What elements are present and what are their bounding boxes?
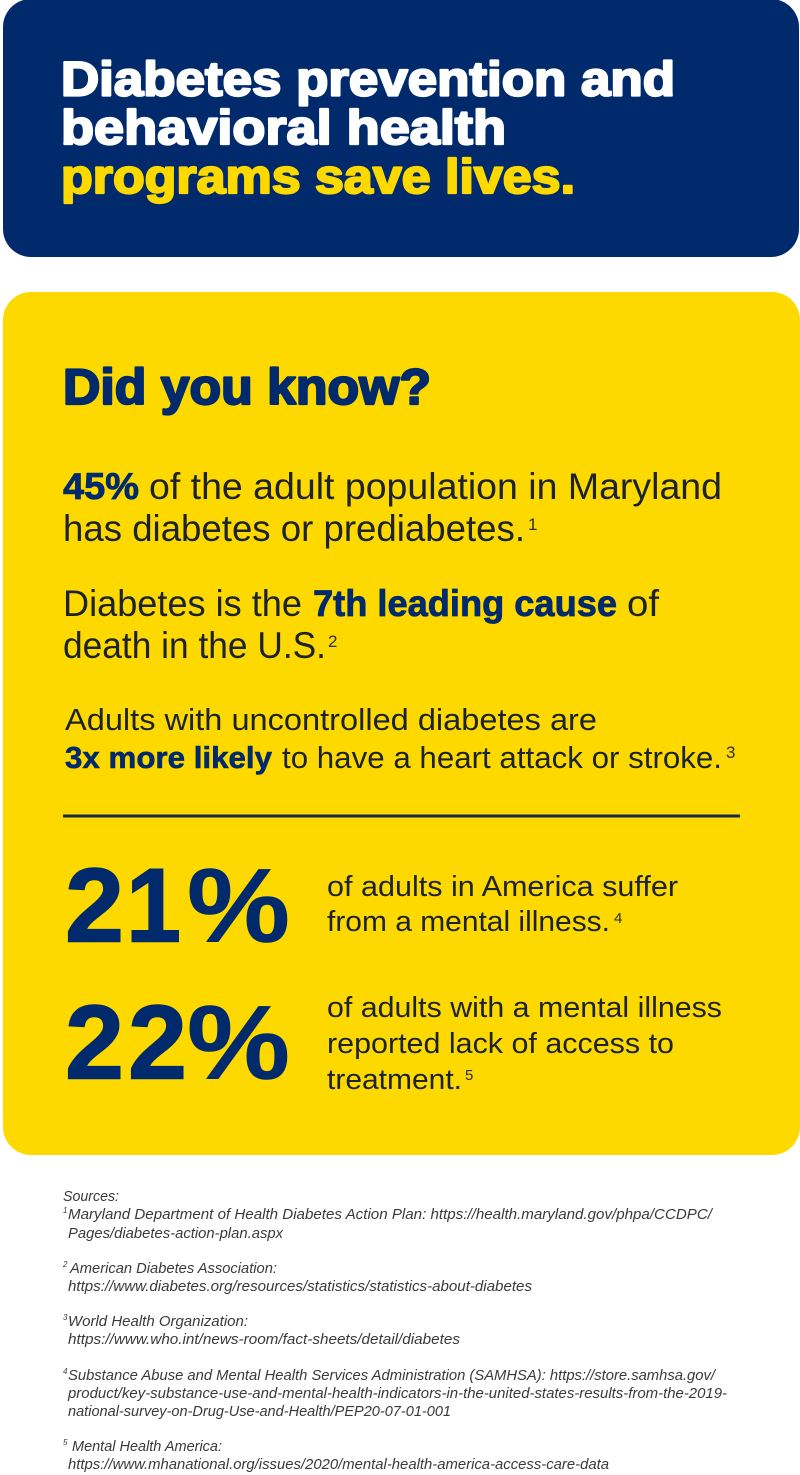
sources: American Diabetes Association:: [69, 1260, 277, 1277]
stat: 21 percent: 1: [126, 848, 181, 964]
sources: Maryland Department of Health Diabetes Action Plan: https://health.maryland.gov/phpa/CCDPC/: [68, 1206, 714, 1223]
sources: 4: [63, 1367, 68, 1376]
sources: Substance Abuse and Mental Health Services Administration (SAMHSA): https://store.samhsa.gov/: [68, 1367, 717, 1384]
fact: 3x more likely: to have a heart attack or stroke.: [282, 740, 722, 775]
fact: 7th leading cause: [63, 583, 660, 666]
stat text: 21 percent: 4: [614, 910, 622, 927]
stat: 21 percent: %: [187, 848, 290, 964]
fact: 3x more likely: 3: [726, 743, 735, 762]
stat: 21 percent: 2: [65, 848, 124, 964]
fact: 3x more likely: [65, 702, 735, 775]
sources: 2: [62, 1260, 68, 1269]
fact: 3x more likely: 3x more likely: [65, 740, 273, 775]
stat text: 22 percent: treatment.: [327, 1064, 462, 1096]
stat: 21 percent: [65, 848, 678, 964]
stat text: 22 percent: 5: [465, 1067, 473, 1084]
stat text: 21 percent: [327, 871, 678, 938]
panel: yellow did you know: [3, 292, 800, 1155]
fact: 7th leading cause: of: [627, 583, 660, 624]
stat: 22 percent: %: [187, 984, 290, 1102]
fact: 7th leading cause: death in the U.S.: [63, 625, 326, 666]
fact: 45 percent: 45%: [63, 466, 139, 507]
fact: 7th leading cause: Diabetes is the: [63, 583, 302, 624]
stat: 22 percent: 2: [128, 984, 187, 1102]
fact: 3x more likely: Adults with uncontrolled diabetes are: [65, 702, 597, 737]
stat text: 22 percent: of adults with a mental illness: [327, 992, 722, 1024]
sources: https://www.mhanational.org/issues/2020/mental-health-america-access-care-data: [68, 1456, 609, 1473]
title: Diabetes prevention and: [61, 54, 675, 106]
sources: https://www.diabetes.org/resources/statistics/statistics-about-diabetes: [68, 1278, 532, 1295]
stat text: 22 percent: reported lack of access to: [327, 1028, 674, 1060]
sources: Pages/diabetes-action-plan.aspx: [68, 1225, 283, 1242]
title: [61, 54, 675, 204]
stat text: 21 percent: of adults in America suffer: [327, 871, 678, 903]
fact: 45 percent: of the adult population in Maryland: [149, 466, 722, 507]
sources: product/key-substance-use-and-mental-health-indicators-in-the-united-states-results-from-the-2019-: [67, 1385, 727, 1402]
stat: 22 percent: [65, 984, 722, 1102]
sources: national-survey-on-Drug-Use-and-Health/PEP20-07-01-001: [68, 1403, 451, 1420]
heading: did you know: Did you know?: [63, 359, 431, 415]
title: behavioral health: [61, 102, 506, 155]
stat: 22 percent: 2: [65, 984, 124, 1102]
sources: Sources:: [63, 1188, 119, 1205]
title: programs save lives.: [61, 151, 575, 204]
sources: Mental Health America:: [72, 1438, 222, 1455]
fact: 45 percent: [63, 466, 722, 549]
sources: 1: [63, 1206, 67, 1215]
fact: 45 percent: has diabetes or prediabetes.: [63, 508, 525, 549]
stat text: 22 percent: [327, 992, 722, 1096]
sources: 5: [63, 1438, 68, 1447]
sources: [62, 1188, 727, 1473]
sources: https://www.who.int/news-room/fact-sheets/detail/diabetes: [68, 1331, 461, 1348]
sources: 3: [63, 1313, 68, 1322]
sources: World Health Organization:: [68, 1313, 248, 1330]
fact: 7th leading cause: 2: [328, 632, 337, 651]
panel: navy header: [3, 0, 799, 257]
fact: 45 percent: 1: [528, 515, 537, 534]
stat text: 21 percent: from a mental illness.: [327, 906, 610, 938]
fact: 7th leading cause: 7th leading cause: [313, 583, 617, 624]
